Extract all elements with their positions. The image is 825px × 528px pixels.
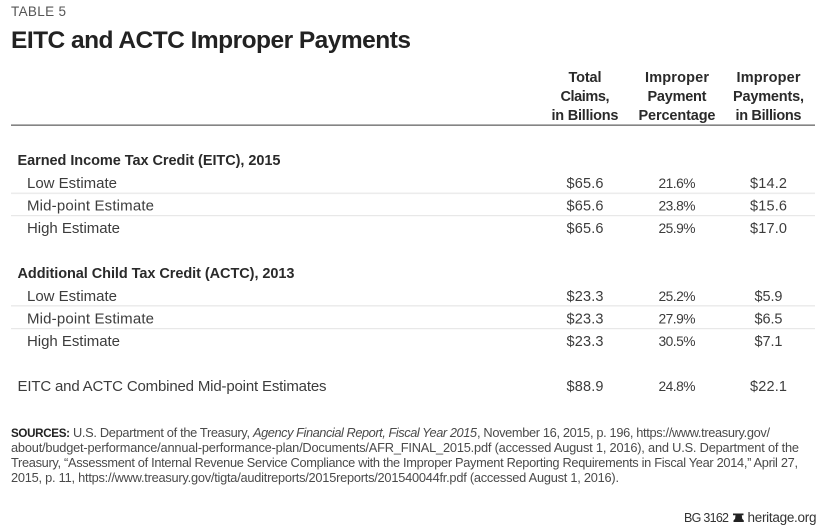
column headers — [552, 70, 804, 124]
row: EITC mid-point estimate: $65.6 — [566, 198, 604, 214]
row: ACTC mid-point estimate: $6.5 — [754, 312, 782, 328]
section heading: ACTC: Additional Child Tax Credit (ACTC), 2013 — [18, 266, 294, 282]
row: combined mid-point estimates: 24.8% — [658, 379, 696, 394]
footer credit: heritage.org — [748, 510, 816, 525]
row: EITC low estimate: $14.2 — [750, 176, 787, 192]
row: ACTC high estimate — [27, 333, 782, 350]
row: ACTC low estimate: $23.3 — [566, 289, 604, 305]
column headers: Total — [568, 70, 602, 86]
sources text: Agency Financial Report, Fiscal Year 2015 — [252, 425, 478, 440]
row: combined mid-point estimates — [18, 378, 787, 395]
column headers: Improper — [736, 70, 801, 86]
row: ACTC low estimate — [27, 288, 782, 305]
column headers: Improper — [645, 70, 709, 86]
column headers: Percentage — [638, 108, 716, 124]
row: ACTC high estimate: 30.5% — [658, 334, 696, 349]
row: EITC high estimate: $65.6 — [566, 221, 604, 237]
row: EITC low estimate — [27, 175, 787, 192]
footer credit — [684, 510, 816, 525]
sources text: 2015, p. 11, https://www.treasury.gov/tigta/auditreports/2015reports/201540044fr.pdf (accessed August 1, 2016). — [11, 470, 619, 485]
column headers: Payment — [648, 89, 707, 105]
row: ACTC high estimate: $23.3 — [566, 334, 604, 350]
row: combined mid-point estimates: $22.1 — [750, 379, 787, 395]
row: ACTC high estimate: High Estimate — [27, 333, 120, 350]
row: EITC high estimate: 25.9% — [658, 221, 696, 236]
row: ACTC high estimate: $7.1 — [754, 334, 782, 350]
row: EITC low estimate: $65.6 — [566, 176, 604, 192]
row: ACTC mid-point estimate: 27.9% — [658, 312, 696, 326]
row: EITC high estimate — [27, 220, 787, 237]
column headers: Payments, — [733, 89, 804, 105]
row: ACTC mid-point estimate: $23.3 — [566, 312, 604, 328]
row: EITC low estimate: Low Estimate — [27, 175, 117, 192]
row: EITC high estimate: $17.0 — [750, 221, 787, 237]
sources text — [11, 425, 799, 485]
row: ACTC low estimate: $5.9 — [754, 289, 782, 305]
row: ACTC mid-point estimate: Mid-point Estimate — [27, 310, 154, 328]
row: EITC mid-point estimate: $15.6 — [750, 198, 787, 214]
column headers: in Billions — [552, 108, 618, 124]
sources text: U.S. Department of the Treasury, — [73, 425, 250, 440]
row: ACTC mid-point estimate — [27, 310, 782, 328]
sources text: about/budget-performance/annual-performance-plan/Documents/AFR_FINAL_2015.pdf (accessed August 1, 2016), and U.S. Department of the — [11, 440, 799, 455]
section: ACTC — [18, 266, 782, 350]
column headers: in Billions — [736, 108, 802, 124]
section: EITC — [18, 153, 787, 237]
row: combined mid-point estimates: EITC and ACTC Combined Mid-point Estimates — [18, 378, 326, 395]
column headers: Claims, — [560, 89, 610, 105]
row: EITC mid-point estimate: 23.8% — [658, 198, 696, 214]
row: combined mid-point estimates: $88.9 — [566, 379, 604, 395]
row: EITC high estimate: High Estimate — [27, 220, 120, 237]
row: ACTC low estimate: 25.2% — [658, 289, 696, 304]
sources text: Treasury, “Assessment of Internal Revenue Service Compliance with the Improper Payment Reporting Requirements in Fiscal Year 2014,” April 27, — [11, 455, 798, 470]
sources text: , November 16, 2015, p. 196, https://www.treasury.gov/ — [477, 425, 770, 440]
footer credit: BG 3162 — [684, 511, 729, 525]
row: EITC low estimate: 21.6% — [658, 176, 696, 191]
table label: TABLE 5 — [11, 4, 66, 19]
row: ACTC low estimate: Low Estimate — [27, 288, 117, 305]
sources text: SOURCES: — [11, 427, 70, 440]
title: EITC and ACTC Improper Payments — [11, 27, 411, 54]
row: EITC mid-point estimate: Mid-point Estimate — [27, 198, 154, 214]
row: EITC mid-point estimate — [27, 198, 787, 214]
section heading: EITC: Earned Income Tax Credit (EITC), 2015 — [18, 153, 280, 169]
icon: liberty bell — [733, 514, 744, 522]
